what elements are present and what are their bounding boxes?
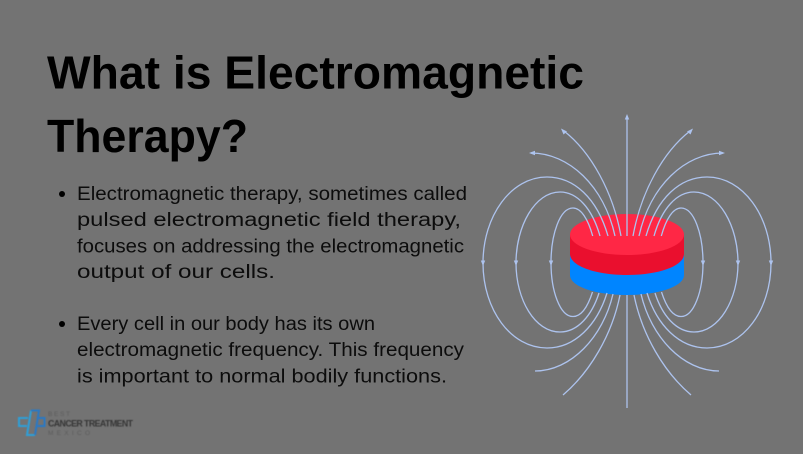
bullet text: cell frequency: Every cell in our body has its own <box>77 314 375 335</box>
bullet text: cell frequency: is important to normal bodily functions. <box>77 366 447 388</box>
bullet text: what electromagnetic therapy is: focuses on addressing the electromagnetic <box>77 236 464 258</box>
logo wordmark: MEXICO <box>48 430 90 437</box>
bullet text: what electromagnetic therapy is <box>59 184 467 283</box>
bullet text: what electromagnetic therapy is: pulsed electromagnetic field therapy, <box>77 210 461 231</box>
field lines <box>481 114 773 408</box>
bullet text: what electromagnetic therapy is: output of our cells. <box>77 262 275 283</box>
logo: Best Cancer Treatment Mexico <box>19 410 134 437</box>
logo wordmark: CANCER TREATMENT <box>48 418 134 428</box>
bullet text: cell frequency <box>59 314 465 388</box>
title: What is Electromagnetic <box>47 46 584 98</box>
magnet with field lines illustration <box>481 114 773 408</box>
title: Therapy? <box>47 110 248 162</box>
title <box>47 46 584 162</box>
magnet south pole: blue base <box>570 255 684 295</box>
logo wordmark: BEST <box>48 411 70 418</box>
magnet top face <box>570 214 684 255</box>
bullet text: cell frequency: electromagnetic frequency. This frequency <box>77 340 465 361</box>
logo wordmark <box>48 411 134 437</box>
magnet north pole: red side <box>570 234 684 275</box>
logo icon: blue cross <box>19 410 44 435</box>
bullet text: what electromagnetic therapy is: Electromagnetic therapy, sometimes called <box>77 184 467 205</box>
arrowheads on left half <box>481 128 567 266</box>
